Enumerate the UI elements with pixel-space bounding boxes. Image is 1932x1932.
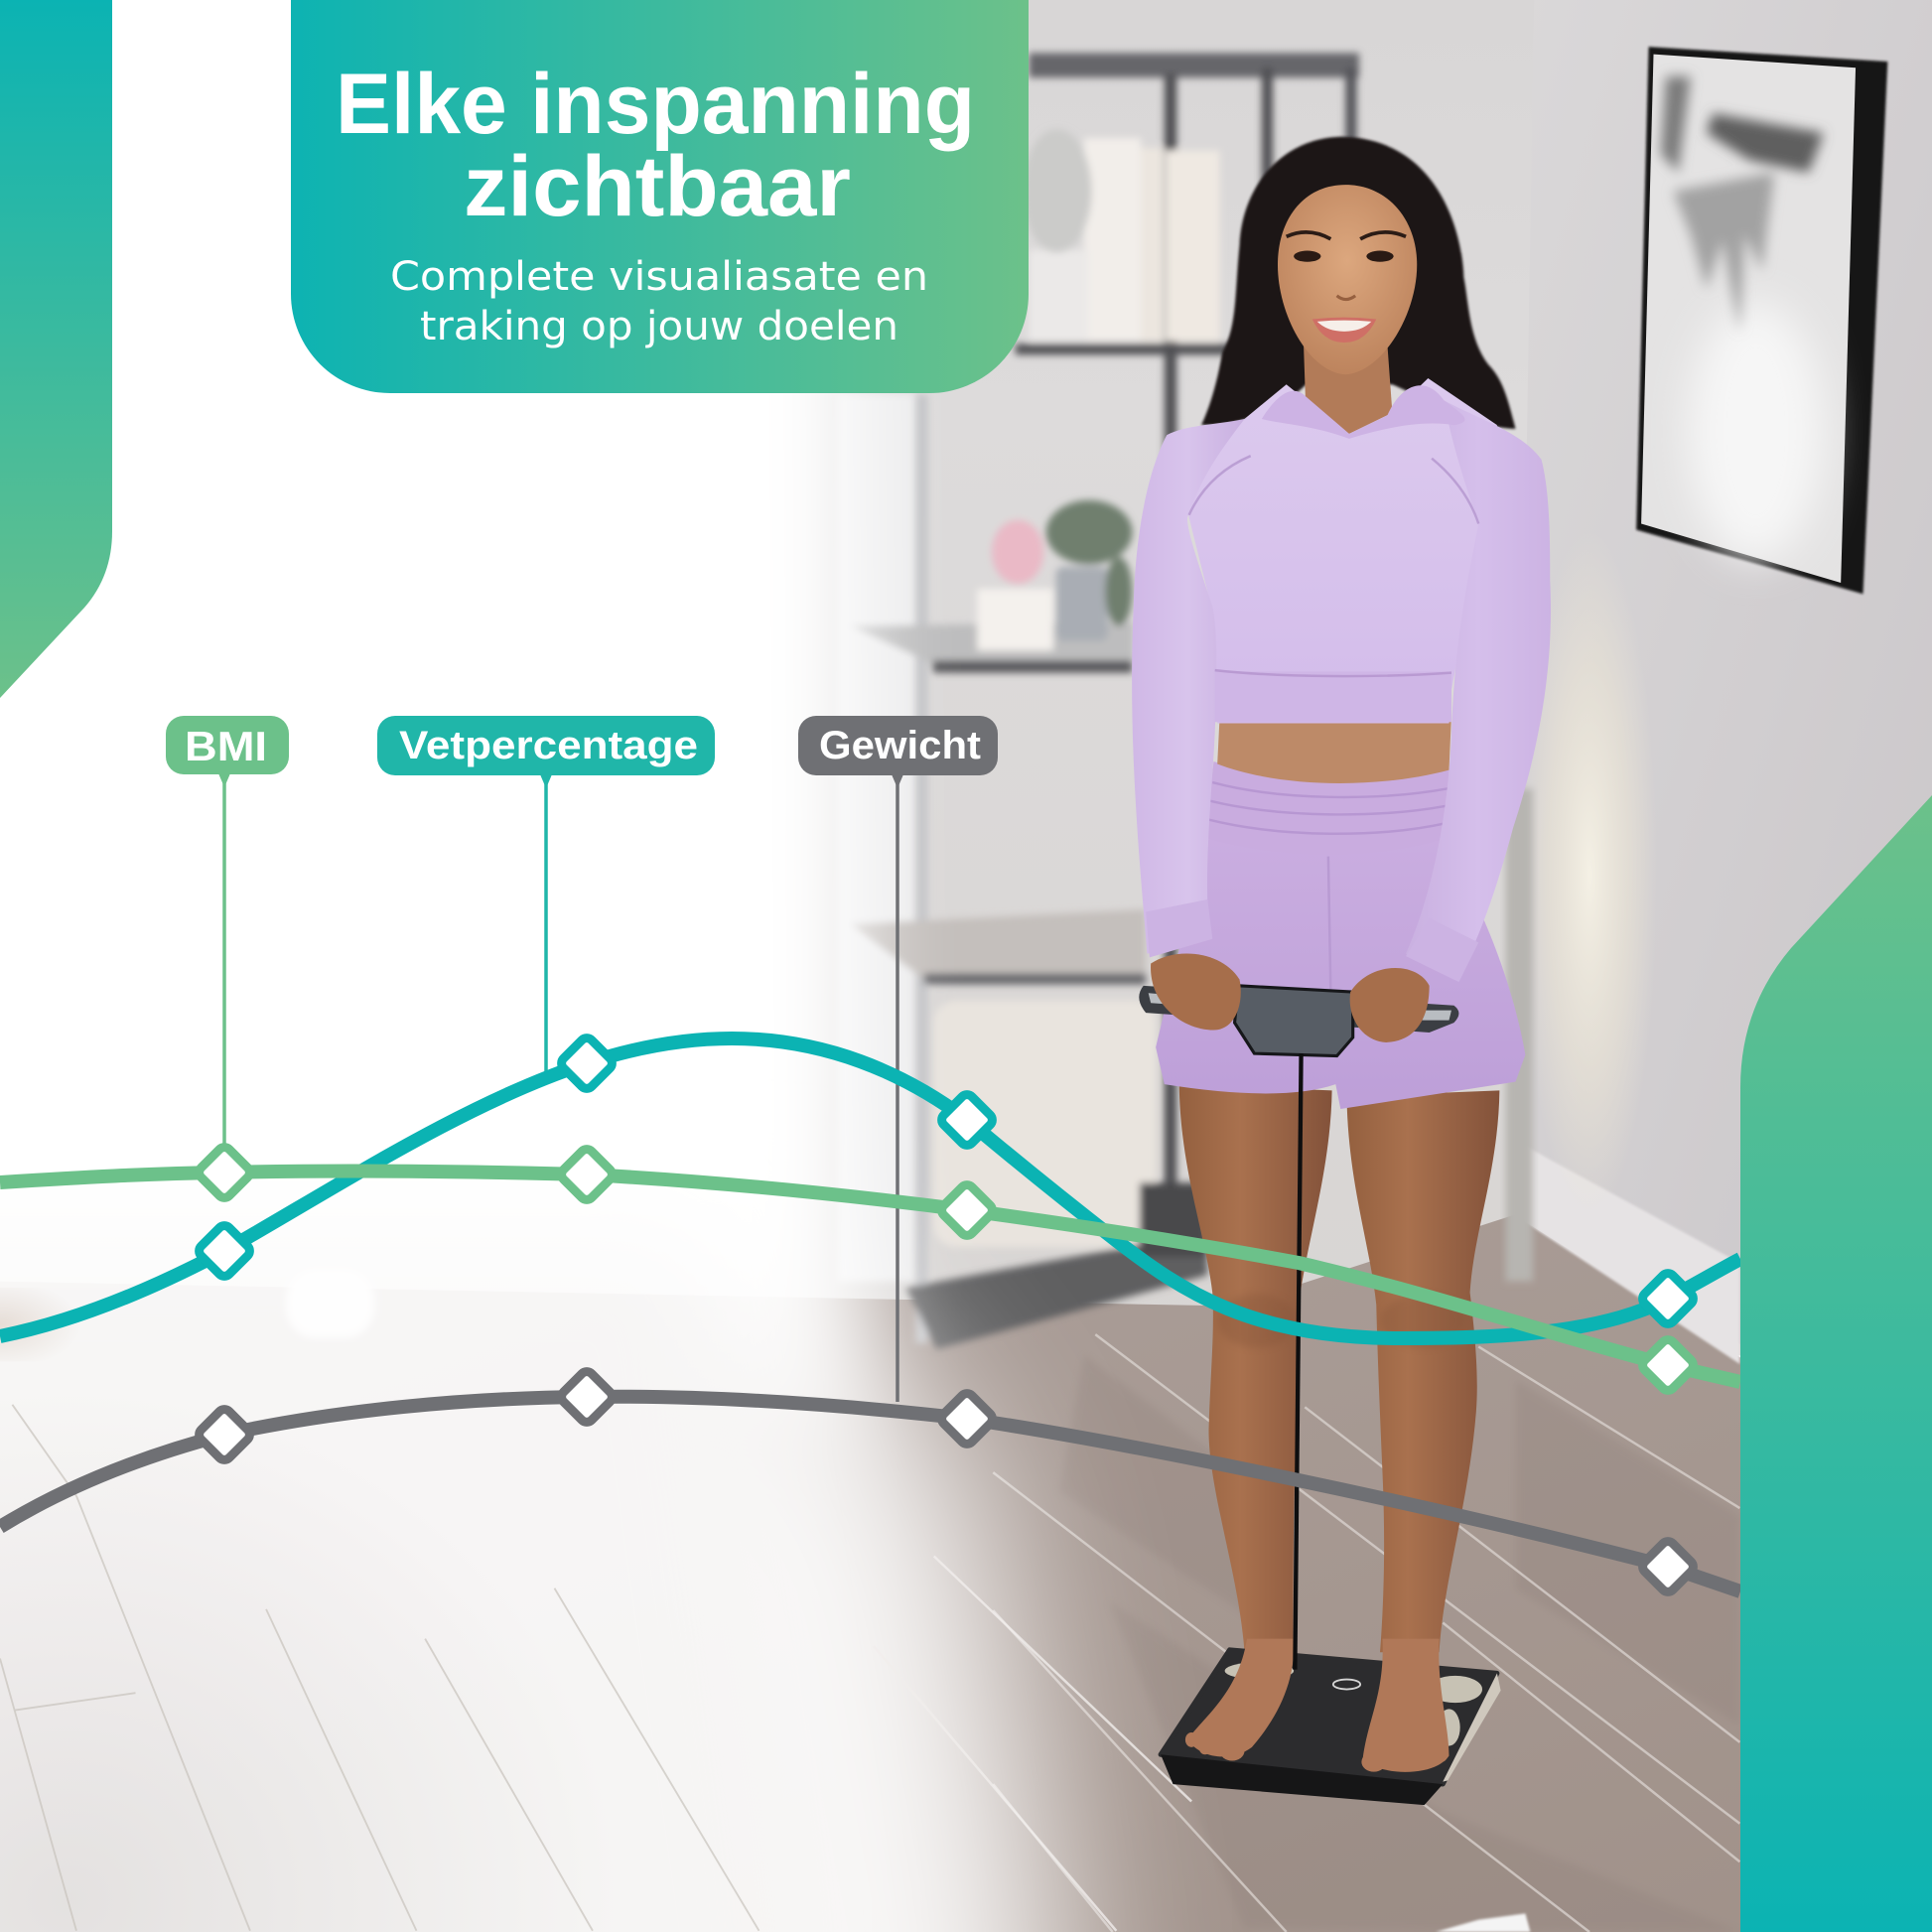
shelf unit — [838, 53, 1359, 1349]
lamp glow — [1522, 530, 1657, 1220]
tan floor patch at far left — [0, 1288, 136, 1361]
woman — [1132, 137, 1551, 1805]
left sleeve — [1132, 419, 1244, 954]
shelf books — [1084, 138, 1141, 342]
knee shading — [1217, 1294, 1465, 1348]
shorts — [1156, 770, 1525, 1109]
connector lines — [224, 773, 897, 1402]
face — [1278, 185, 1417, 374]
handle — [1139, 986, 1458, 1056]
title: zichtbaar — [464, 139, 851, 234]
subtitle — [390, 254, 928, 349]
subtitle: Complete visualiasate en — [390, 254, 928, 300]
label: BMI: BMI — [185, 723, 267, 769]
label: BMI — [166, 716, 289, 787]
side wall — [1514, 0, 1932, 1453]
ottoman feet — [286, 1269, 374, 1338]
line: BMI — [0, 1172, 1740, 1382]
legs — [1179, 1084, 1332, 1682]
neck — [1304, 345, 1392, 434]
hem and cuffs — [1215, 671, 1451, 722]
markers: Vetpercentage — [197, 1035, 1696, 1326]
label: Gewicht — [798, 716, 998, 788]
hoodie body — [1182, 378, 1497, 724]
paper scraps on floor — [1436, 1913, 1530, 1932]
white fade over left of photo — [0, 0, 1168, 1932]
markers: BMI — [197, 1145, 1696, 1393]
lamp post — [1506, 788, 1533, 1282]
right corner panel — [1740, 795, 1932, 1932]
label: Gewicht: Gewicht — [819, 724, 981, 767]
waistband — [1205, 761, 1449, 855]
left corner panel — [0, 0, 112, 698]
feet — [1185, 1639, 1449, 1772]
line: Gewicht — [0, 1397, 1740, 1591]
grey floor tint at lower left — [0, 1294, 690, 1932]
label: Vetpercentage: Vetpercentage — [399, 724, 698, 767]
hood collar — [1262, 385, 1464, 439]
facial features — [1287, 232, 1406, 343]
subtitle: traking op jouw doelen — [420, 304, 898, 349]
scale — [1161, 1650, 1501, 1805]
label: Vetpercentage — [377, 716, 715, 788]
title panel — [291, 0, 1029, 393]
midriff — [1217, 715, 1451, 783]
floor — [0, 1215, 1932, 1932]
line: Vetpercentage — [0, 1038, 1740, 1338]
faint plank lines under the fade — [0, 1405, 759, 1931]
hands — [1151, 953, 1241, 1031]
floor plank tone — [1059, 1355, 1739, 1932]
wall — [0, 0, 1932, 1355]
hair — [1201, 137, 1516, 429]
right sleeve — [1406, 400, 1551, 980]
title — [336, 57, 975, 234]
cable — [1295, 1053, 1302, 1670]
bright plank lines — [874, 1556, 1191, 1931]
baseboard — [1514, 1144, 1739, 1364]
markers: Gewicht — [197, 1369, 1696, 1594]
title: Elke inspanning — [336, 57, 975, 152]
floor planks — [993, 1334, 1739, 1932]
picture on the wall — [1636, 47, 1887, 594]
